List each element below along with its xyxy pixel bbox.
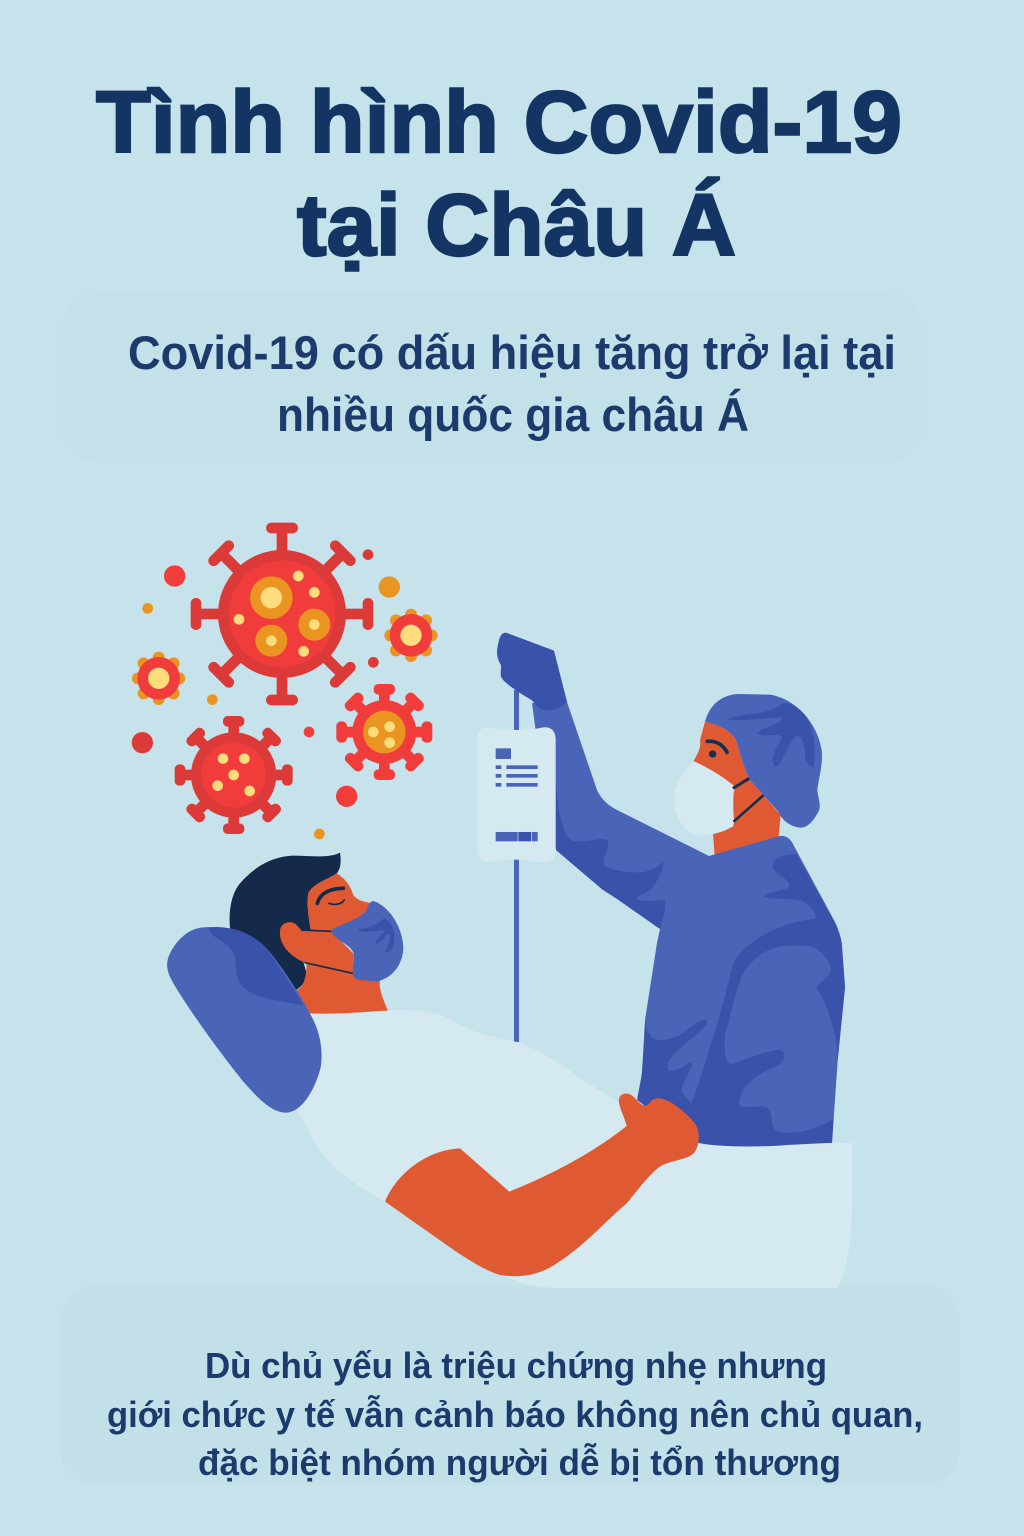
right virus [336,684,432,780]
IV pole [514,690,519,1042]
doctor [497,633,845,1147]
large virus [191,523,373,705]
patient head [230,853,403,1015]
patient [167,853,852,1288]
bottom note: giới chức y tế vẫn cảnh báo không nên chủ quan, [107,1394,923,1435]
gown shading: torso [637,854,845,1147]
bottom note: Dù chủ yếu là triệu chứng nhẹ nhưng [205,1345,827,1386]
blanket and bed sheet [297,1010,852,1288]
small virus right [384,609,438,662]
doctor head [674,694,822,860]
patient arm [385,1094,699,1276]
floating particles [132,549,400,839]
subtitle: Covid-19 có dấu hiệu tăng trở lại tại [128,326,896,379]
bottom note [107,1345,923,1483]
title: tại Châu Á [297,177,736,274]
panel: subtitle background [62,292,922,462]
small virus left [132,652,185,705]
doctor gown [532,702,845,1146]
bottom note: đặc biệt nhóm người dễ bị tổn thương [198,1442,841,1483]
title [96,74,902,274]
doctor glove [497,633,567,710]
subtitle: nhiều quốc gia châu Á [277,388,749,441]
IV bag [478,727,556,863]
gown shading: arm [556,783,665,929]
panel: bottom note background [60,1285,960,1485]
virus cluster [132,523,438,839]
subtitle [128,326,896,441]
title: Tình hình Covid-19 [96,74,902,171]
lower-left virus [175,716,293,834]
pillow [167,927,322,1113]
